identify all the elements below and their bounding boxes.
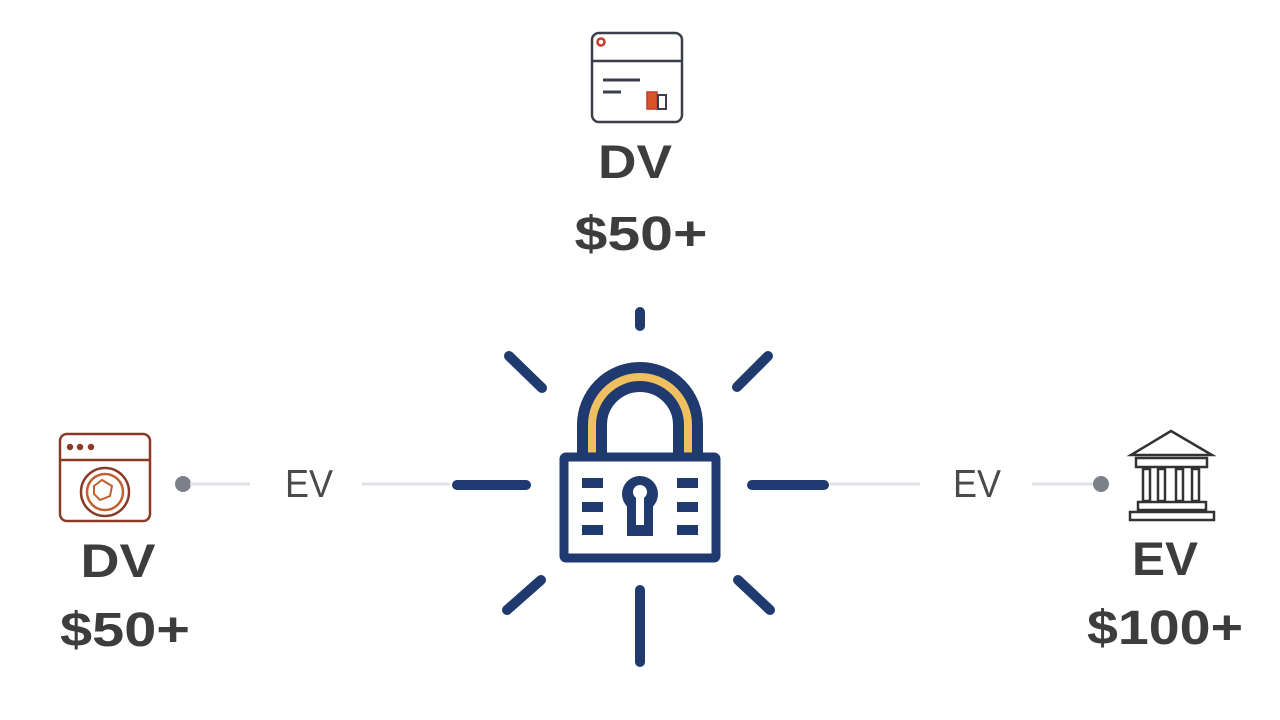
- icon: left browser with globe: [60, 434, 150, 521]
- keyhole: [622, 476, 658, 512]
- connector label: right EV: EV: [953, 463, 1001, 506]
- price: top $50+: $50+: [574, 208, 708, 261]
- price: right $100+: $100+: [1087, 602, 1243, 655]
- bars: [582, 478, 698, 535]
- heading: top DV: DV: [598, 135, 673, 188]
- icon: top browser card: [592, 33, 682, 122]
- heading: right EV: EV: [1132, 532, 1199, 585]
- connector: right: [830, 476, 1109, 492]
- body: [564, 457, 716, 558]
- connector label: left EV: EV: [285, 463, 333, 506]
- price: left $50+: $50+: [60, 604, 190, 657]
- shackle: [592, 377, 688, 455]
- rays: [457, 312, 824, 662]
- icon: right bank building: [1130, 431, 1214, 520]
- heading: left DV: DV: [80, 534, 156, 587]
- connector: left: [175, 476, 450, 492]
- icon: central padlock with rays: [457, 312, 824, 662]
